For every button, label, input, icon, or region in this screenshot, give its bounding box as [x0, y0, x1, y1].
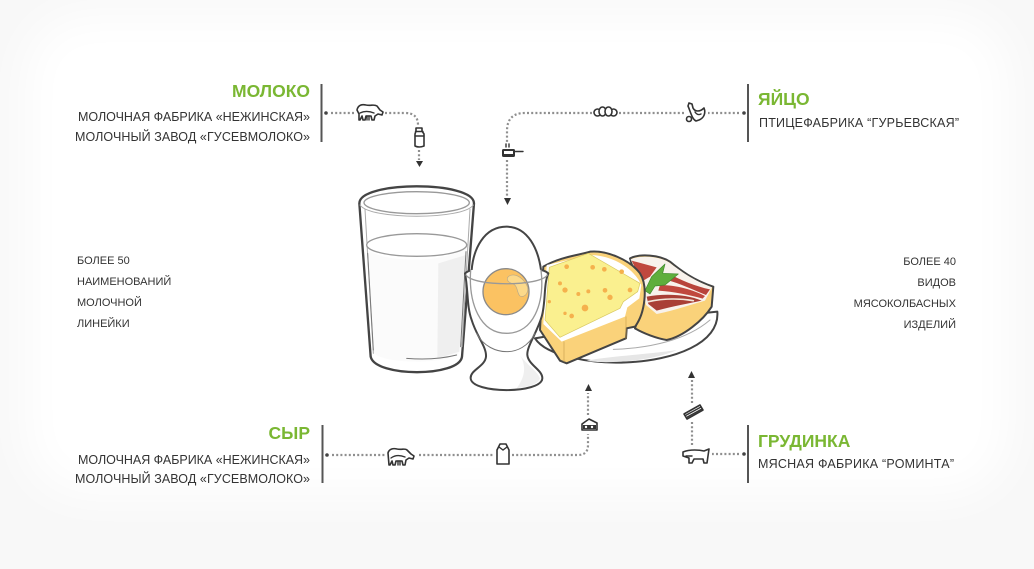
glass of milk — [359, 186, 474, 372]
note: meat range: БОЛЕЕ 40 — [903, 256, 956, 268]
note: meat range: ИЗДЕЛИЙ — [904, 318, 956, 331]
text block: bacon: ГРУДИНКА — [758, 431, 851, 451]
icon: eggs — [594, 107, 617, 116]
icon: milk bottle — [497, 444, 509, 464]
note: dairy range: МОЛОЧНОЙ — [77, 296, 142, 309]
divider bars — [322, 84, 748, 483]
bacon toast — [630, 255, 713, 340]
icon: bacon — [684, 405, 703, 419]
egg in cup — [465, 227, 548, 390]
illustration: breakfast — [359, 186, 717, 390]
text block: cheese: МОЛОЧНАЯ ФАБРИКА «НЕЖИНСКАЯ» — [78, 453, 310, 467]
text block: egg: ПТИЦЕФАБРИКА “ГУРЬЕВСКАЯ” — [759, 116, 959, 130]
text block: egg: ЯЙЦО — [758, 88, 810, 109]
note: dairy range — [77, 255, 171, 330]
connector: bacon — [683, 371, 746, 463]
icon: pig — [683, 449, 709, 463]
text block: bacon — [758, 431, 954, 471]
icon: milk bottle — [415, 128, 424, 147]
text block: milk: МОЛОКО — [232, 81, 310, 101]
plate — [535, 312, 717, 363]
text block: milk — [75, 81, 310, 144]
icon: frying pan — [502, 144, 523, 157]
connector: cheese — [325, 384, 597, 465]
note: dairy range: БОЛЕЕ 50 — [77, 255, 130, 267]
cheese toast — [540, 251, 645, 363]
note: meat range — [854, 256, 957, 331]
connector: egg — [502, 103, 746, 205]
text block: bacon: МЯСНАЯ ФАБРИКА “РОМИНТА” — [758, 457, 954, 471]
text block: egg — [758, 88, 959, 130]
text block: cheese: МОЛОЧНЫЙ ЗАВОД «ГУСЕВМОЛОКО» — [75, 471, 310, 486]
icon: chicken — [686, 103, 705, 122]
text block: milk: МОЛОЧНЫЙ ЗАВОД «ГУСЕВМОЛОКО» — [75, 129, 310, 144]
icon: cow — [357, 105, 383, 120]
text block: cheese: СЫР — [269, 423, 310, 443]
icon: cheese — [582, 419, 597, 430]
connector: milk — [324, 105, 424, 167]
text block: milk: МОЛОЧНАЯ ФАБРИКА «НЕЖИНСКАЯ» — [78, 110, 310, 124]
text block: cheese — [75, 423, 310, 486]
icon: cow — [388, 449, 414, 465]
note: meat range: ВИДОВ — [917, 277, 956, 289]
note: dairy range: ЛИНЕЙКИ — [77, 317, 130, 330]
note: dairy range: НАИМЕНОВАНИЙ — [77, 275, 171, 288]
note: meat range: МЯСОКОЛБАСНЫХ — [854, 298, 957, 310]
